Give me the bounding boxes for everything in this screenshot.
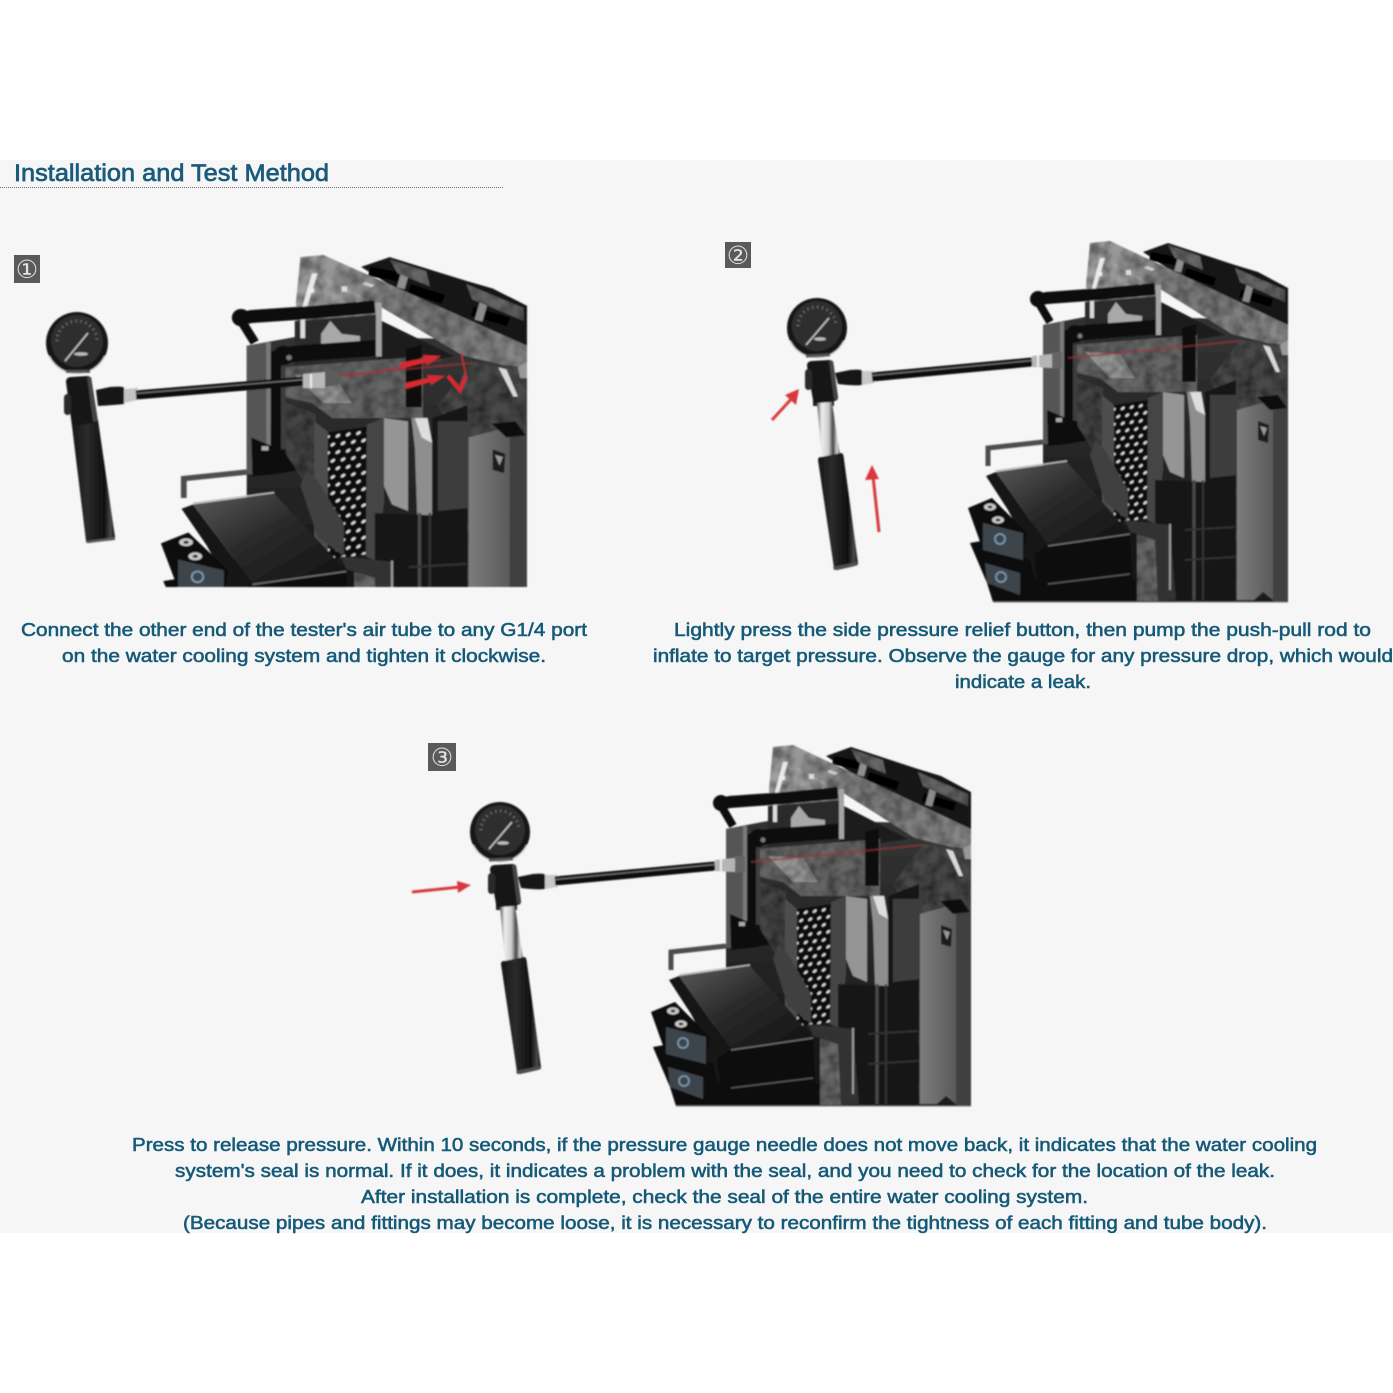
step 3 badge: ③ — [431, 743, 453, 772]
step 3 illustration — [412, 745, 971, 1106]
pressure tester — [470, 802, 745, 1074]
step 2 badge: ② — [727, 241, 749, 270]
red arrow: pump rod — [865, 465, 879, 532]
step 1 caption — [21, 619, 587, 666]
step 1 caption: Connect the other end of the tester's air tube to any G1/4 port — [21, 619, 587, 640]
step 2 caption — [653, 619, 1393, 692]
red arrow: press relief button — [772, 389, 799, 420]
step 1 illustration — [44, 254, 528, 588]
step 2 caption: Lightly press the side pressure relief button, then pump the push-pull rod to — [674, 619, 1371, 640]
step 3 caption: After installation is complete, check the seal of the entire water cooling system. — [361, 1186, 1088, 1207]
water cooling system — [651, 745, 971, 1106]
red arrow: release pressure — [412, 881, 471, 893]
step 3 caption: system's seal is normal. If it does, it indicates a problem with the seal, and you need to check for the location of the leak. — [175, 1160, 1275, 1181]
pressure tester — [787, 298, 1062, 570]
step 2 caption: inflate to target pressure. Observe the gauge for any pressure drop, which would — [653, 645, 1393, 666]
red arrows on port — [344, 352, 466, 390]
pressure tester with closed handle — [46, 312, 339, 543]
step 3 caption: Press to release pressure. Within 10 seconds, if the pressure gauge needle does not move back, it indicates that the water cooling — [132, 1134, 1317, 1155]
water cooling system — [968, 241, 1288, 602]
step 1 badge: ① — [16, 255, 38, 284]
step 1 caption: on the water cooling system and tighten it clockwise. — [62, 645, 546, 666]
background panel — [0, 160, 1393, 1233]
step 2 illustration — [772, 241, 1288, 602]
step 2 caption: indicate a leak. — [955, 671, 1091, 692]
step 3 caption — [132, 1134, 1317, 1233]
water cooling system — [160, 254, 528, 588]
step 3 caption: (Because pipes and fittings may become loose, it is necessary to reconfirm the tightness of each fitting and tube body). — [183, 1212, 1267, 1233]
title: Installation and Test Method — [14, 160, 329, 187]
